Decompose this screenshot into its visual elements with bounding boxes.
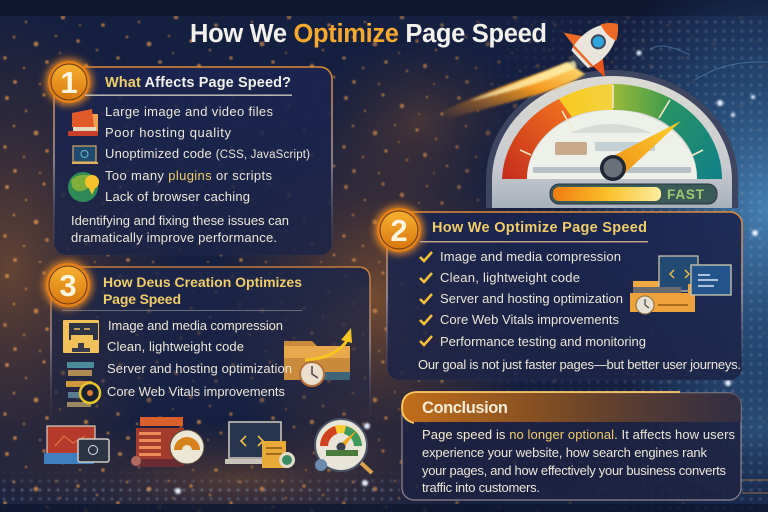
panel: conclusion <box>402 392 741 500</box>
checklist <box>420 249 646 349</box>
heading 2: How We Optimize Page Speed <box>432 220 647 236</box>
icon: folder with image <box>63 320 99 353</box>
conclusion text: experience your website, how search engines rank <box>422 445 708 460</box>
icon: image files <box>68 109 98 136</box>
list item: Server and hosting optimization <box>107 361 292 376</box>
icon: server with gauge <box>131 417 204 467</box>
check item: Server and hosting optimization <box>440 291 623 306</box>
fast label bar <box>550 184 717 204</box>
list item: Poor hosting quality <box>105 125 232 140</box>
heading 3: Page Speed <box>103 291 181 307</box>
conclusion text <box>422 427 736 495</box>
closing note: dramatically improve performance. <box>71 230 277 245</box>
list item: Large image and video files <box>105 104 274 119</box>
icon: laptop code <box>72 146 98 164</box>
panel 1: what affects page speed <box>46 59 332 255</box>
icon: globe with pin <box>68 172 99 202</box>
icon: laptop with code <box>225 422 295 468</box>
closing note: Identifying and fixing these issues can <box>71 213 289 228</box>
list item: Core Web Vitals improvements <box>107 384 286 399</box>
badge 3: 3 <box>59 268 77 303</box>
conclusion text: your pages, and how effectively your business converts <box>422 463 726 478</box>
heading 1: What Affects Page Speed? <box>105 75 291 91</box>
conclusion text: Page speed is no longer optional. It affects how users <box>422 427 736 442</box>
conclusion header band <box>402 393 741 422</box>
check item: Clean, lightweight code <box>440 270 580 285</box>
conclusion text: traffic into customers. <box>422 480 540 495</box>
title: How We Optimize Page Speed <box>190 20 547 48</box>
speed gauge <box>486 70 738 208</box>
icon: folder and code windows <box>630 256 731 314</box>
list item: Unoptimized code (CSS, JavaScript) <box>105 146 310 161</box>
icon: media card <box>44 426 109 464</box>
badge 2 <box>375 206 423 254</box>
list item: Too many plugins or scripts <box>105 168 272 183</box>
icon row <box>44 417 372 473</box>
list item: Image and media compression <box>108 318 283 333</box>
check item: Performance testing and monitoring <box>440 334 646 349</box>
badge 1: 1 <box>60 65 78 100</box>
list item: Lack of browser caching <box>105 189 250 204</box>
heading underline <box>420 241 648 242</box>
rocket with flame <box>442 2 638 119</box>
panel 3: how deus creation optimizes page speed <box>44 261 370 420</box>
list item: Clean, lightweight code <box>107 339 244 354</box>
fast label bar: FAST <box>667 187 705 202</box>
heading 3 <box>103 274 302 307</box>
heading underline <box>62 310 302 311</box>
badge 2: 2 <box>390 213 408 248</box>
conclusion heading: Conclusion <box>422 399 508 417</box>
heading underline <box>85 94 292 96</box>
check item: Image and media compression <box>440 249 621 264</box>
heading 3: How Deus Creation Optimizes <box>103 274 302 290</box>
icon: folder with growth arrow and clock <box>284 328 352 386</box>
panel 2: how we optimize page speed <box>375 206 742 380</box>
icon: gauge with magnifier <box>315 419 372 473</box>
badge 3 <box>44 261 92 309</box>
closing note: Our goal is not just faster pages—but better user journeys. <box>418 357 741 372</box>
icon: server with vitals ring <box>66 362 100 407</box>
check item: Core Web Vitals improvements <box>440 312 620 327</box>
header glow edge <box>402 392 680 423</box>
badge 1 <box>46 59 92 105</box>
